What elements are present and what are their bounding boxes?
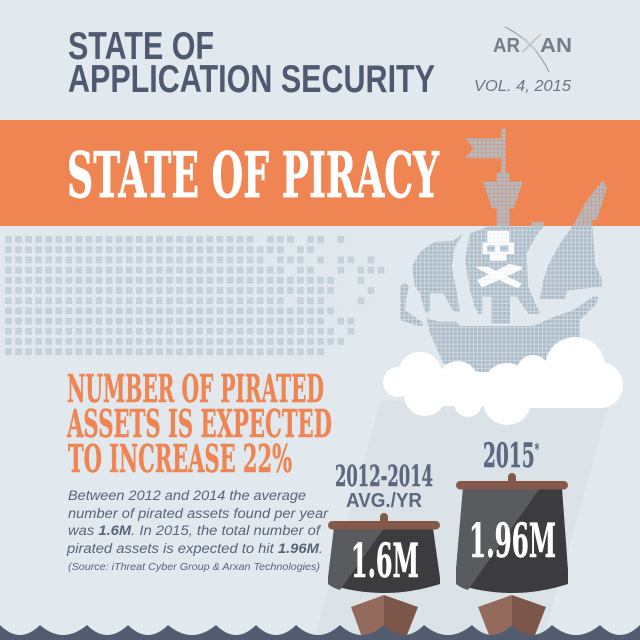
headline: number of pirated assets: [66, 366, 332, 481]
title: state of application security: APPLICATION SECURITY: [68, 58, 435, 101]
sail: 2012-2014 bar: [328, 513, 440, 593]
volume label: VOL. 4, 2015: [474, 78, 571, 95]
headline: number of pirated assets: NUMBER OF PIRATED: [67, 366, 324, 411]
yard: [456, 481, 568, 490]
logo: Arxan: AN: [540, 35, 572, 57]
label: 2012-2014 average per year: 2012-2014: [335, 459, 433, 493]
hull: [426, 297, 598, 377]
right sail: [540, 180, 607, 299]
value: 1.6M: 1.6M: [351, 534, 419, 589]
body text: number of pirated assets found per year: [68, 506, 329, 521]
title: state of application security: STATE OF: [68, 25, 214, 68]
headline: number of pirated assets: ASSETS IS EXPECTED: [66, 401, 332, 446]
label: 2012-2014 average per year: [335, 459, 433, 512]
sail: 2015 bar: [456, 473, 568, 593]
left sail: [412, 233, 463, 312]
mast knob: [508, 473, 516, 485]
main sail: [465, 222, 544, 324]
body text: pirated assets is expected to hit 1.96M .: [66, 541, 323, 556]
cloud shadow beam: [314, 400, 608, 640]
value: 1.96M: 1.96M: [469, 514, 556, 569]
skull and crossbones: [475, 231, 522, 288]
body text: [66, 488, 329, 573]
label: 2015: *: [535, 440, 539, 458]
logo: Arxan: AR: [493, 35, 521, 57]
mast knob: [380, 513, 388, 525]
waves: [0, 625, 640, 640]
body text: Between 2012 and 2014 the average: [68, 488, 306, 503]
crow's nest and mast: [483, 173, 523, 227]
data pixel field: [5, 236, 388, 358]
label: 2012-2014 average per year: AVG./YR: [346, 490, 423, 512]
body text: was 1.6M. In 2015, the total number of: [68, 523, 321, 538]
label: 2015: 2015: [483, 436, 578, 476]
hull: 2015 ship: [478, 595, 546, 640]
orange banner: [0, 120, 640, 226]
logo: Arxan: [493, 27, 572, 72]
logo: Arxan: X: [521, 35, 539, 57]
hull: 2012-2014 ship: [351, 595, 418, 640]
title: state of application security: [68, 25, 435, 101]
cloud: [383, 337, 623, 425]
yard: [328, 521, 440, 530]
pirate ship made of pixels: [400, 128, 607, 377]
flag and pole: [465, 128, 505, 173]
stern rigging: [400, 283, 423, 326]
headline: number of pirated assets: TO INCREASE 22%: [68, 436, 292, 481]
body text: (Source: iThreat Cyber Group & Arxan Technologies): [68, 561, 320, 573]
